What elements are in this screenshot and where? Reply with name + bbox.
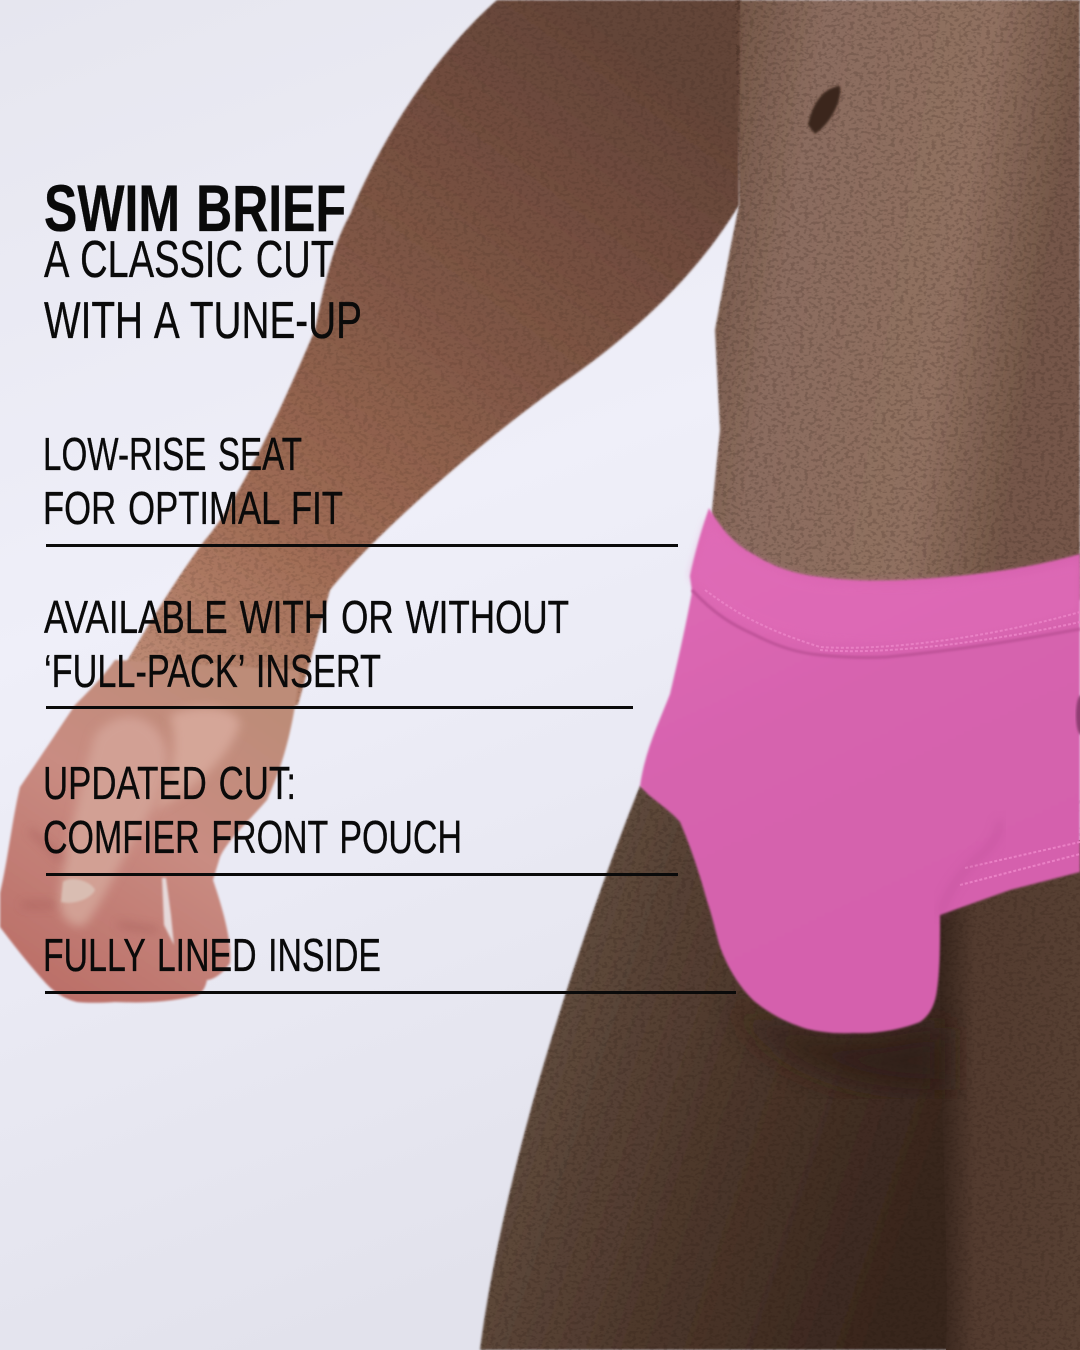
- navel: [808, 86, 840, 134]
- feature: updated cut: COMFIER FRONT POUCH: [43, 811, 462, 863]
- thumb: [59, 717, 167, 926]
- waistband stitching: [705, 590, 1080, 651]
- shadow creases: [22, 830, 158, 930]
- feature: fully lined: FULLY LINED INSIDE: [43, 929, 381, 981]
- right edge shadow dot: [1076, 695, 1080, 735]
- feature: updated cut: UPDATED CUT:: [43, 757, 296, 809]
- thumbnail: [61, 879, 95, 903]
- palm and fingers base: [0, 660, 300, 1003]
- palm highlight: [155, 708, 240, 810]
- subheading: WITH A TUNE-UP: [44, 292, 362, 350]
- leg stitching: [960, 842, 1080, 885]
- waistband highlight: [692, 520, 1080, 645]
- crotch shadow: [730, 1000, 945, 1090]
- feature: fully lined: [43, 929, 736, 994]
- subheading: [44, 231, 362, 350]
- feature: full-pack insert: AVAILABLE WITH OR WITHOUT: [44, 591, 569, 643]
- text block: [43, 171, 736, 994]
- heading: SWIM BRIEF: [44, 171, 346, 245]
- feature: updated cut: [43, 757, 678, 876]
- torso: [700, 0, 1080, 600]
- waistband seam: [692, 590, 1080, 658]
- feature: low-rise seat: [43, 428, 678, 547]
- feature: low-rise seat: LOW-RISE SEAT: [43, 428, 302, 480]
- left leg: [480, 786, 950, 1350]
- subheading: A CLASSIC CUT: [44, 231, 334, 289]
- arm: [90, 0, 740, 720]
- front crease: [940, 820, 1000, 915]
- right leg: [940, 840, 1080, 1350]
- arm hair texture: [130, 0, 740, 705]
- feature: low-rise seat: FOR OPTIMAL FIT: [43, 482, 343, 534]
- body hair texture: [470, 0, 1080, 1350]
- feature: full-pack insert: ‘FULL-PACK’ INSERT: [44, 645, 381, 697]
- hand: [0, 660, 300, 1003]
- feature: full-pack insert: [44, 591, 633, 709]
- pink swim brief: [640, 508, 1080, 1033]
- finger gaps: [162, 878, 174, 945]
